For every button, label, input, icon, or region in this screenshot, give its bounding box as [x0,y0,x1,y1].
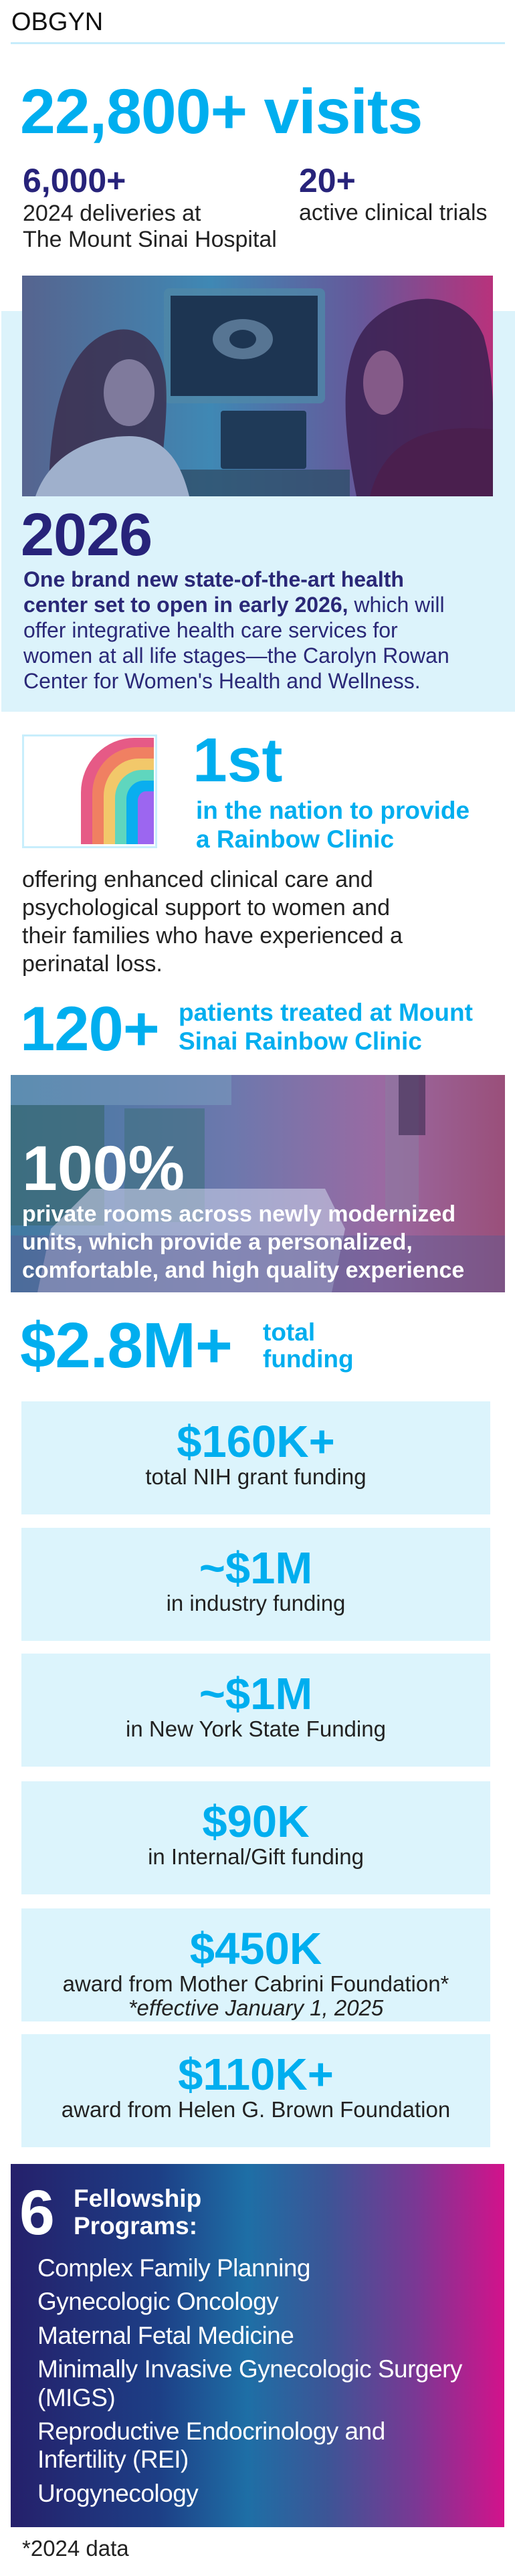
program list: Urogynecology [37,2480,198,2507]
stat: clinical trials [299,162,488,225]
program list: (MIGS) [37,2384,115,2411]
1st number: 1st [193,725,282,795]
stat: 100% private rooms [22,1133,464,1283]
deliveries label [23,201,277,252]
card: industry funding: in industry funding [167,1591,345,1615]
card: Helen G. Brown award: award from Helen G. Brown Foundation [62,2097,450,2122]
1st label: a Rainbow Clinic [196,825,394,853]
rainbow clinic description: psychological support to women and [22,895,390,920]
2026 description: Center for Women's Health and Wellness. [23,669,421,693]
header label: OBGYN [11,8,103,36]
rainbow clinic description: their families who have experienced a [22,923,403,949]
card: internal/gift funding [21,1781,490,1894]
2026 number: 2026 [21,502,152,569]
2026 description [23,567,449,693]
footnote: *2024 data [22,2536,129,2561]
trials number: 20+ [299,162,356,199]
100% label: private rooms across newly modernized [22,1201,455,1227]
120+ number: 120+ [20,993,159,1064]
card: NYS funding: in New York State Funding [126,1716,386,1741]
card: Mother Cabrini award: *effective January 1, 2025 [128,1995,383,2020]
120+ label: Sinai Rainbow Clinic [179,1027,422,1055]
1st label: in the nation to provide [196,797,470,824]
program list: Infertility (REI) [37,2446,189,2473]
fellowship number: 6 [19,2177,55,2248]
funding number: $2.8M+ [20,1310,232,1381]
headline: visits: 22,800+ visits [20,76,422,147]
card: Helen G. Brown award: $110K+ [178,2050,334,2100]
card: Helen G. Brown award [21,2034,490,2147]
photo: ultrasound exam [22,276,493,496]
120+ label: patients treated at Mount [179,999,473,1026]
rainbow clinic description: perinatal loss. [22,951,163,977]
card: NIH funding: $160K+ [177,1417,335,1467]
2026 description: offer integrative health care services for [23,618,398,642]
rainbow clinic description: offering enhanced clinical care and [22,867,373,892]
program list: Reproductive Endocrinology and [37,2417,385,2445]
program list [37,2254,463,2507]
fellowship heading: Fellowship [74,2185,201,2212]
funding label: funding [263,1345,354,1373]
card: NIH funding [21,1401,490,1514]
100% label: units, which provide a personalized, [22,1229,413,1255]
card: internal/gift funding: $90K [202,1797,310,1847]
fellowship heading: Programs: [74,2212,197,2240]
stat: total funding [20,1310,354,1381]
program list: Complex Family Planning [37,2254,310,2282]
2026 description: center set to open in early 2026, which will [23,593,445,617]
card: industry funding: ~$1M [199,1543,312,1593]
photo: private room [11,1075,505,1292]
card: NIH funding: total NIH grant funding [145,1464,367,1489]
funding label [263,1318,354,1373]
card: internal/gift funding: in Internal/Gift funding [148,1844,364,1869]
stat: deliveries [23,162,277,252]
card: NYS funding: ~$1M [199,1669,312,1719]
card: Mother Cabrini award: award from Mother Cabrini Foundation* [63,1971,449,1996]
deliveries number: 6,000+ [23,162,126,199]
100% label [22,1201,464,1283]
2026 description: One brand new state-of-the-art health [23,567,404,591]
stat: 1st rainbow clinic [193,725,470,853]
1st label [196,797,470,853]
panel: 2026 health center [1,311,515,712]
card: industry funding [21,1528,490,1641]
120+ label [179,999,473,1055]
stat: 120+ patients [20,993,473,1064]
trials label: active clinical trials [299,200,488,225]
program list: Gynecologic Oncology [37,2288,278,2315]
icon: rainbow [22,734,157,848]
panel: fellowship programs [11,2164,504,2527]
card: NYS funding [21,1654,490,1767]
card: Mother Cabrini award: $450K [190,1924,322,1974]
rainbow clinic description [22,867,403,977]
program list: Maternal Fetal Medicine [37,2322,294,2349]
card: Mother Cabrini award [21,1908,490,2021]
100% label: comfortable, and high quality experience [22,1258,464,1283]
deliveries label: The Mount Sinai Hospital [23,227,277,252]
2026 description: women at all life stages—the Carolyn Rowan [23,643,449,668]
100% number: 100% [22,1133,185,1204]
deliveries label: 2024 deliveries at [23,201,201,226]
program list: Minimally Invasive Gynecologic Surgery [37,2355,462,2383]
fellowship heading [74,2185,201,2240]
funding label: total [263,1318,315,1346]
